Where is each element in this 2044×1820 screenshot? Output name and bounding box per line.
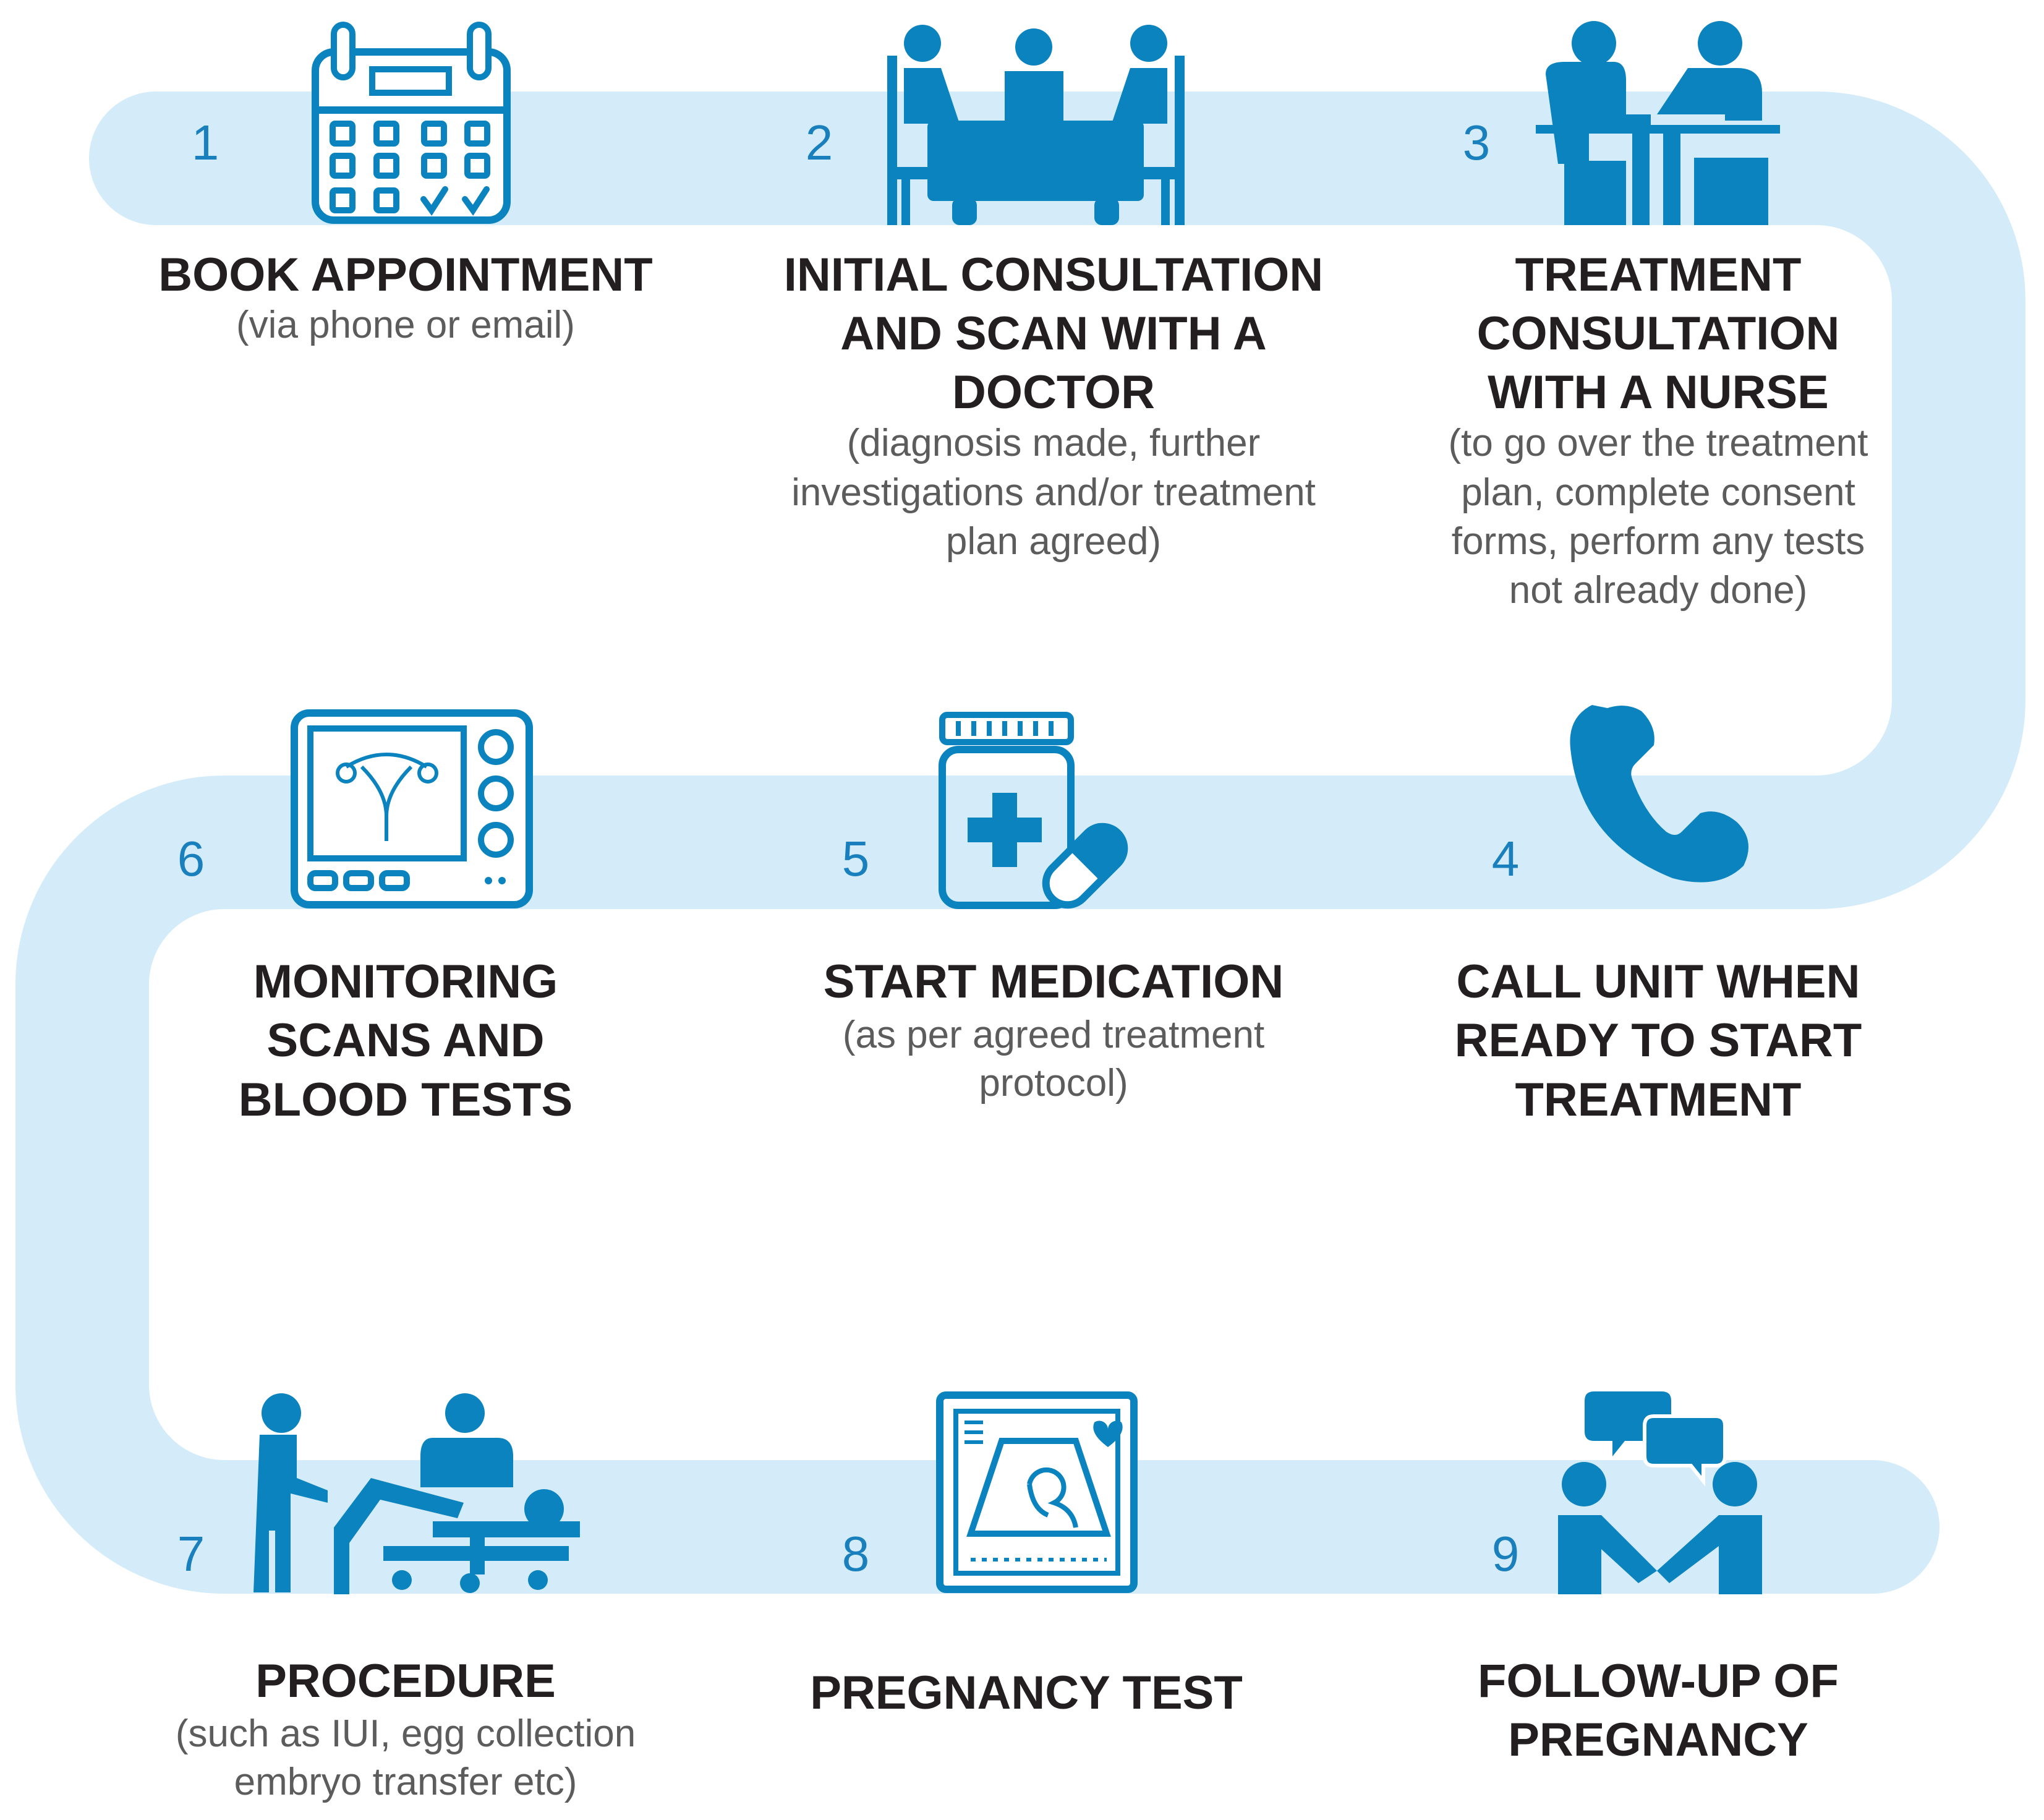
step 5 <box>824 715 1284 1104</box>
subtext 7: (such as IUI, egg collection <box>176 1712 636 1755</box>
icon: phone <box>1570 705 1748 882</box>
icon: medication <box>942 715 1133 914</box>
step 3: CONSULTATION <box>1477 307 1839 360</box>
icon: ultrasound scan <box>940 1395 1134 1589</box>
subtext 1: (via phone or email) <box>236 304 575 346</box>
step 6: SCANS AND <box>267 1014 544 1067</box>
icon: handshake with speech bubbles <box>1558 1391 1762 1594</box>
icon: nurse consultation <box>1536 21 1780 225</box>
step 2 <box>784 25 1323 563</box>
heading 9: FOLLOW-UP OF <box>1478 1655 1839 1707</box>
heading 7: PROCEDURE <box>255 1655 556 1707</box>
number 8: 8 <box>842 1526 869 1581</box>
step 4 <box>1455 705 1862 1126</box>
heading 2: INITIAL CONSULTATION <box>784 249 1323 301</box>
step 3: not already done) <box>1509 569 1807 612</box>
step 2: AND SCAN WITH A <box>840 307 1267 360</box>
step 3: forms, perform any tests <box>1452 520 1865 563</box>
number 1: 1 <box>192 115 219 170</box>
step 7: embryo transfer etc) <box>234 1761 577 1803</box>
heading 8: PREGNANCY TEST <box>810 1667 1243 1719</box>
heading 6: MONITORING <box>253 955 558 1008</box>
step 6: BLOOD TESTS <box>239 1074 573 1126</box>
step 4: READY TO START <box>1455 1014 1862 1067</box>
step 1 <box>158 25 653 346</box>
heading 4: CALL UNIT WHEN <box>1457 955 1860 1008</box>
number 3: 3 <box>1463 115 1490 170</box>
subtext 2: (diagnosis made, further <box>847 422 1260 464</box>
step 6 <box>177 713 573 1126</box>
step 2: DOCTOR <box>952 366 1155 419</box>
path band <box>82 158 1959 1527</box>
step 5: protocol) <box>979 1062 1128 1104</box>
step 9 <box>1478 1391 1839 1766</box>
step 3: plan, complete consent <box>1461 471 1855 514</box>
heading 1: BOOK APPOINTMENT <box>158 249 653 301</box>
icon: ultrasound monitor <box>294 713 529 905</box>
step 4: TREATMENT <box>1515 1074 1801 1126</box>
number 7: 7 <box>177 1526 205 1581</box>
number 6: 6 <box>177 831 205 886</box>
step 2: investigations and/or treatment <box>791 471 1316 514</box>
icon: doctor consultation <box>887 25 1185 225</box>
icon: calendar <box>315 25 507 220</box>
number 9: 9 <box>1492 1526 1519 1581</box>
step 8 <box>810 1395 1243 1719</box>
heading 3: TREATMENT <box>1515 249 1801 301</box>
subtext 5: (as per agreed treatment <box>843 1014 1264 1056</box>
number 5: 5 <box>842 831 869 886</box>
subtext 3: (to go over the treatment <box>1449 422 1868 464</box>
step 7 <box>176 1393 636 1803</box>
number 4: 4 <box>1492 831 1519 886</box>
number 2: 2 <box>806 115 833 170</box>
step 3: WITH A NURSE <box>1488 366 1829 419</box>
icon: procedure <box>253 1393 580 1594</box>
step 2: plan agreed) <box>946 520 1161 563</box>
heading 5: START MEDICATION <box>824 955 1284 1008</box>
step 9: PREGNANCY <box>1508 1714 1808 1766</box>
step 3 <box>1449 21 1868 612</box>
